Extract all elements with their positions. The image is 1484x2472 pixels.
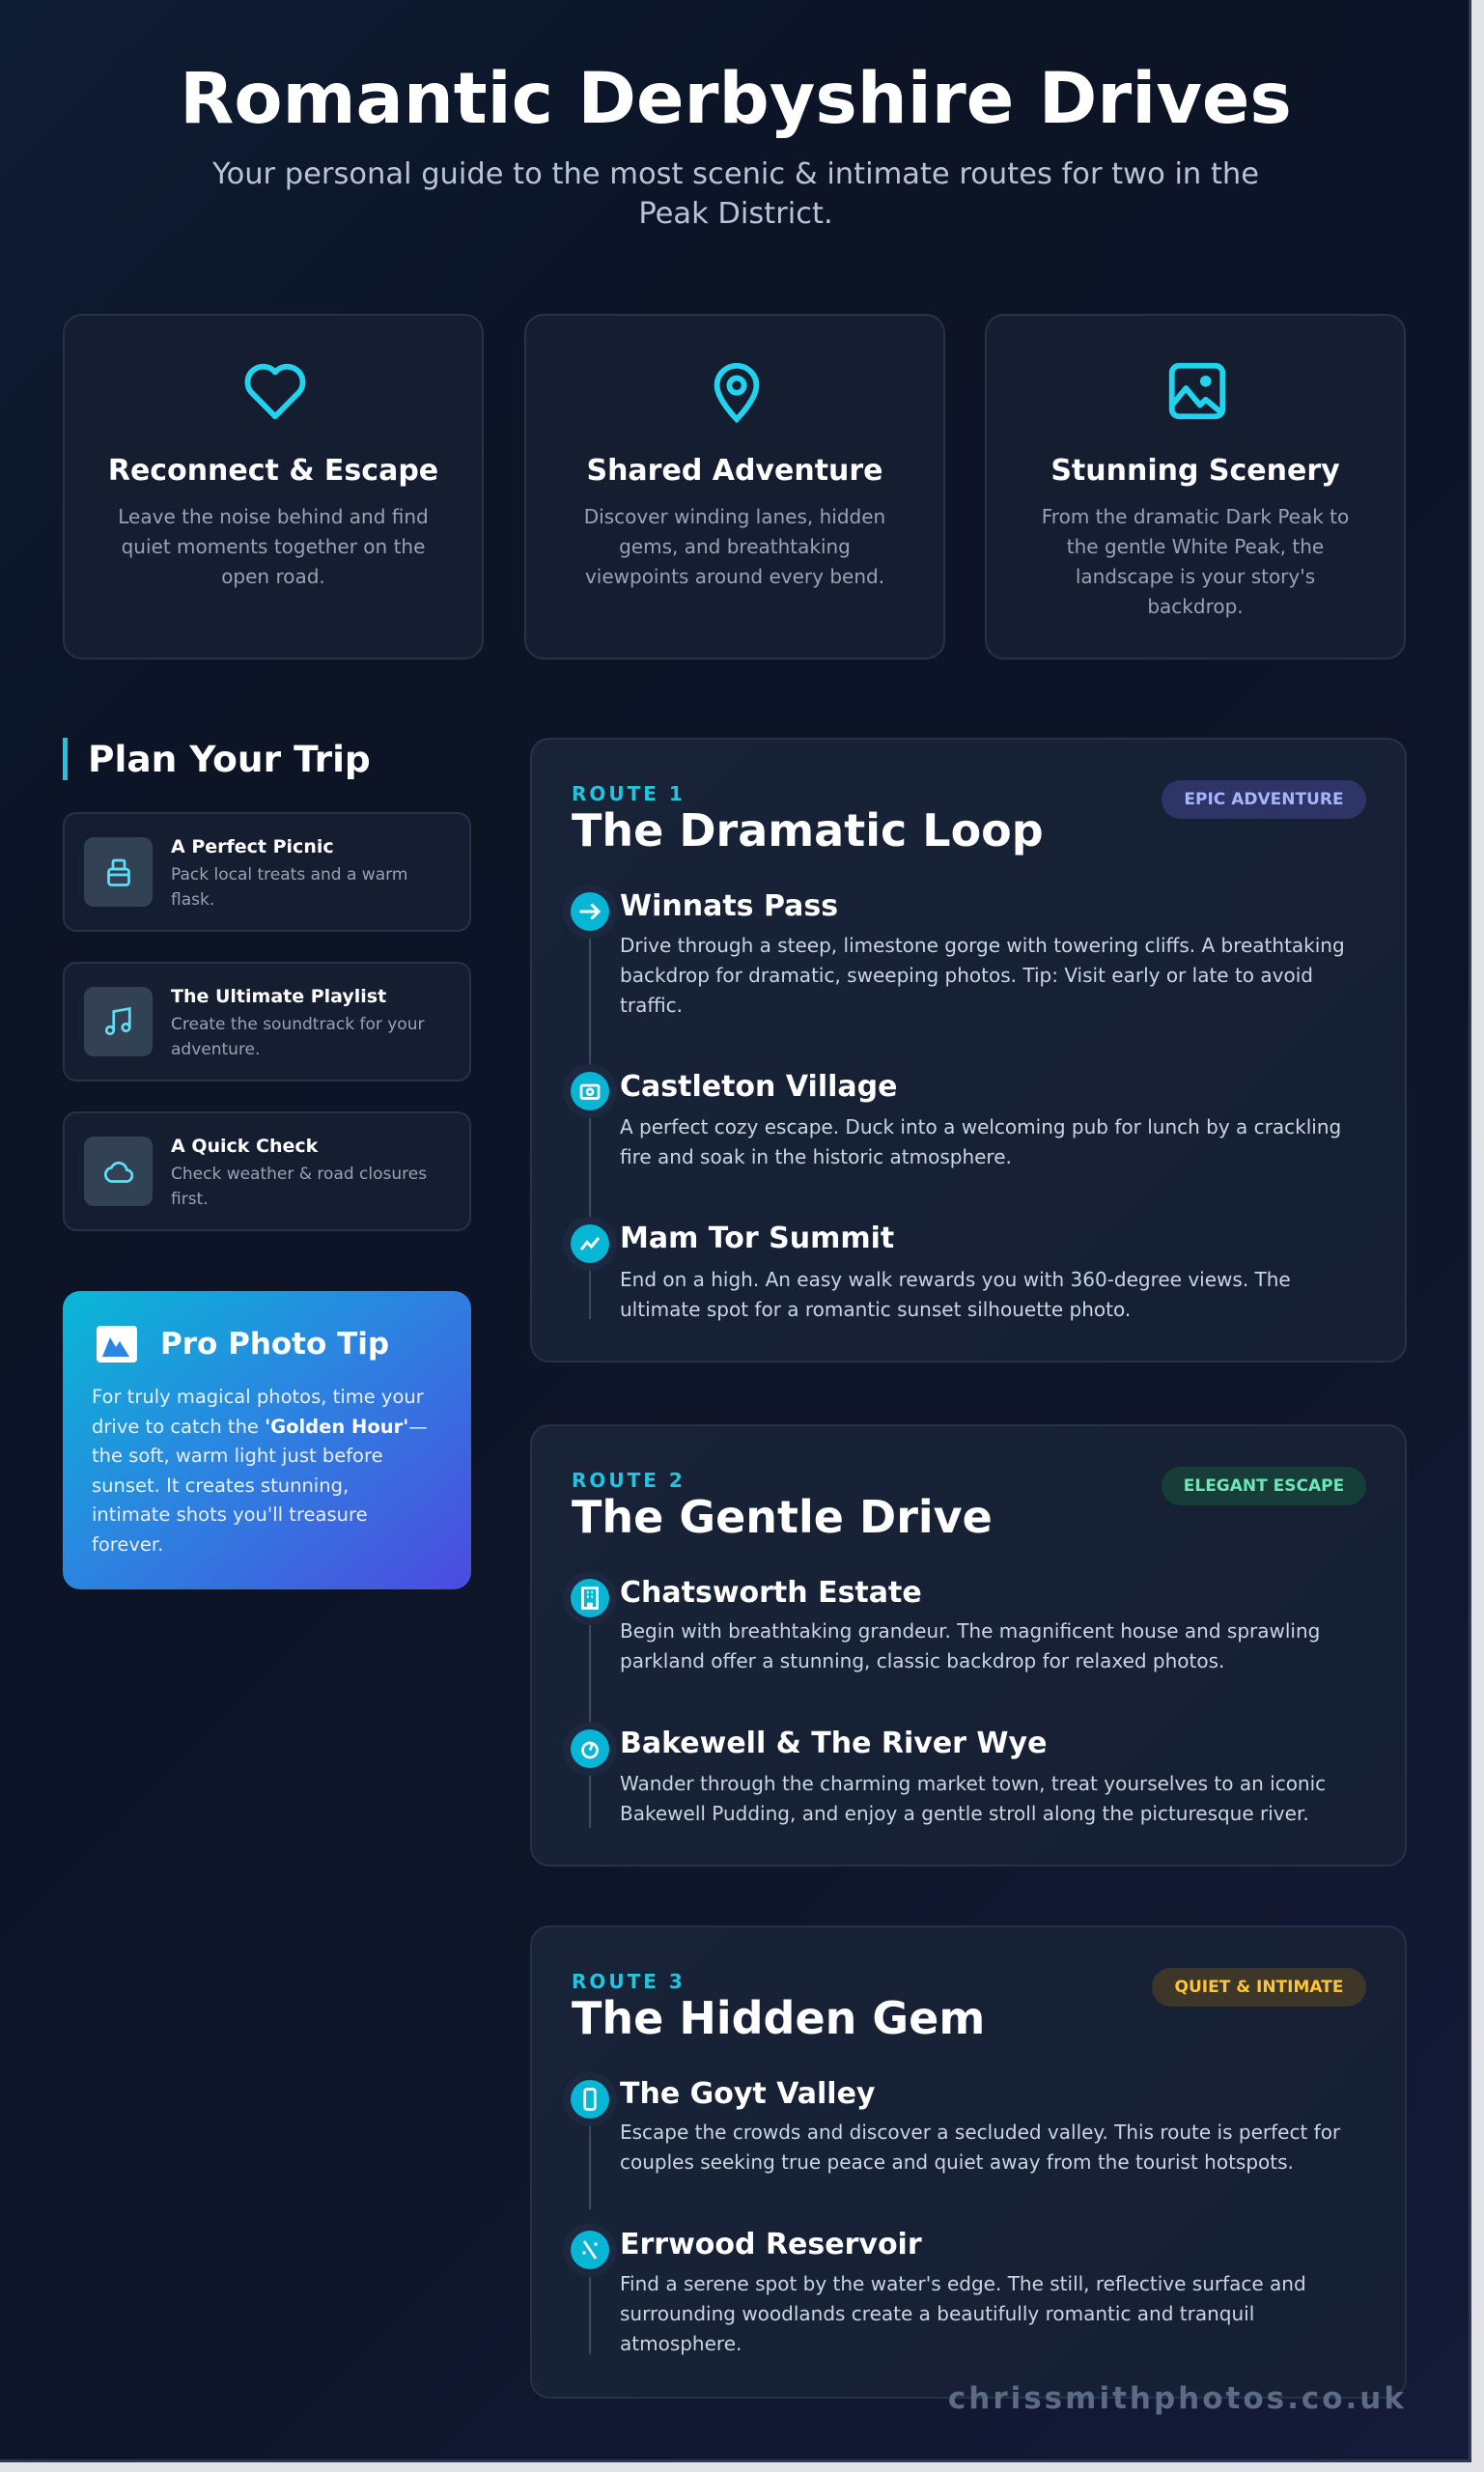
card: quick check: Check weather & road closures: [171, 1165, 427, 1184]
panel: route 3: Errwood Reservoir: [620, 2228, 922, 2261]
stop: winnats pass: [564, 885, 1345, 1017]
panel: route 2: [530, 1424, 1407, 1867]
badge: epic adventure: EPIC ADVENTURE: [1184, 790, 1344, 809]
panel: reconnect & escape: Reconnect & Escape: [108, 454, 438, 488]
panel: route 3: ROUTE 3: [572, 1970, 686, 1993]
panel: stunning scenery: backdrop.: [1147, 595, 1244, 618]
panel: stunning scenery: [985, 314, 1406, 660]
panel: stunning scenery: From the dramatic Dark Peak to: [1042, 505, 1349, 528]
stop: bakewell: [563, 1722, 1326, 1825]
panel: route 1: ultimate spot for a romantic sunset silhouette photo.: [620, 1298, 1131, 1321]
card: quick check: first.: [171, 1190, 209, 1209]
panel: reconnect & escape: [63, 314, 484, 660]
panel: route 1: fire and soak in the historic atmosphere.: [620, 1145, 1012, 1168]
callout: pro photo tip: intimate shots you'll treasure: [92, 1503, 368, 1526]
stop: mam tor summit: [563, 1217, 1291, 1321]
panel: route 1: A perfect cozy escape. Duck into a welcoming pub for lunch by a crackling: [620, 1115, 1341, 1138]
icon: flask: [84, 837, 153, 907]
panel: route 2: Bakewell & The River Wye: [620, 1727, 1047, 1760]
card: ultimate playlist: The Ultimate Playlist: [171, 986, 386, 1007]
panel: shared adventure: Discover winding lanes, hidden: [584, 505, 885, 528]
panel: route 3: [530, 1925, 1407, 2399]
panel: reconnect & escape: Leave the noise behind and find: [118, 505, 429, 528]
panel: route 1: Winnats Pass: [620, 889, 838, 923]
panel: route 3: surrounding woodlands create a beautifully romantic and tranquil: [620, 2302, 1254, 2325]
card: quick check: [63, 1111, 471, 1231]
icon: heart: [245, 363, 305, 419]
panel: route 1: ROUTE 1: [572, 782, 686, 805]
panel: route 2: ROUTE 2: [572, 1469, 686, 1492]
panel: route 2: Wander through the charming market town, treat yourselves to an iconic: [620, 1772, 1326, 1795]
callout: pro photo tip: sunset. It creates stunning,: [92, 1474, 349, 1497]
panel: route 2: parkland offer a stunning, classic backdrop for relaxed photos.: [620, 1649, 1224, 1672]
panel: route 2: Bakewell Pudding, and enjoy a gentle stroll along the picturesque river.: [620, 1802, 1309, 1825]
icon: map pin: [714, 363, 759, 423]
title: Romantic Derbyshire Drives: [180, 58, 1292, 140]
panel: route 1: End on a high. An easy walk rewards you with 360-degree views. The: [620, 1268, 1291, 1291]
card: quick check: A Quick Check: [171, 1136, 318, 1157]
subtitle: Peak District.: [638, 197, 833, 231]
panel: stunning scenery: landscape is your story's: [1076, 565, 1315, 588]
panel: route 3: Escape the crowds and discover a secluded valley. This route is perfect for: [620, 2121, 1340, 2144]
panel: route 1: Mam Tor Summit: [620, 1222, 894, 1255]
panel: route 2: Chatsworth Estate: [620, 1576, 922, 1610]
subtitle: Your personal guide to the most scenic & intimate routes for two in the: [212, 157, 1259, 191]
icon: cloud: [84, 1137, 153, 1206]
panel: shared adventure: Shared Adventure: [586, 454, 883, 488]
card: perfect picnic: flask.: [171, 890, 214, 910]
badge: epic adventure: [1162, 780, 1366, 819]
subtitle: [212, 157, 1259, 231]
panel: route 3: couples seeking true peace and quiet away from the tourist hotspots.: [620, 2150, 1294, 2174]
card: perfect picnic: [63, 812, 471, 932]
badge: quiet & intimate: QUIET & INTIMATE: [1175, 1978, 1343, 1997]
callout: pro photo tip: forever.: [92, 1533, 163, 1555]
badge: quiet & intimate: [1152, 1968, 1366, 2007]
icon: photo: [97, 1326, 137, 1362]
card: ultimate playlist: adventure.: [171, 1040, 260, 1059]
panel: shared adventure: gems, and breathtaking: [619, 535, 851, 558]
icon: music: [84, 987, 153, 1056]
panel: route 1: The Dramatic Loop: [572, 804, 1044, 857]
stop: castleton village: [563, 1064, 1341, 1168]
panel: stunning scenery: Stunning Scenery: [1050, 454, 1340, 488]
stop: chatsworth estate: [564, 1571, 1320, 1672]
panel: route 1: traffic.: [620, 994, 683, 1017]
panel: shared adventure: viewpoints around every bend.: [585, 565, 884, 588]
watermark: chrissmithphotos.co.uk: [948, 2381, 1407, 2416]
callout: pro photo tip: drive to catch the 'Golden Hour'—: [92, 1416, 428, 1437]
panel: route 3: Find a serene spot by the water's edge. The still, reflective surface and: [620, 2272, 1306, 2295]
icon: image: [1168, 363, 1226, 419]
callout: pro photo tip: the soft, warm light just before: [92, 1445, 383, 1467]
panel: route 3: atmosphere.: [620, 2332, 742, 2355]
panel: stunning scenery: the gentle White Peak, the: [1067, 535, 1324, 558]
heading: plan your trip: Plan Your Trip: [88, 738, 371, 780]
panel: route 1: backdrop for dramatic, sweeping photos. Tip: Visit early or late to avoid: [620, 964, 1313, 987]
card: perfect picnic: A Perfect Picnic: [171, 836, 334, 857]
panel: route 3: The Goyt Valley: [620, 2077, 875, 2111]
callout: pro photo tip: Pro Photo Tip: [160, 1327, 389, 1362]
panel: reconnect & escape: quiet moments together on the: [122, 535, 425, 558]
panel: route 1: [530, 738, 1407, 1362]
panel: route 1: Castleton Village: [620, 1070, 897, 1104]
badge: elegant escape: [1162, 1467, 1366, 1505]
panel: route 2: Begin with breathtaking grandeur. The magnificent house and sprawling: [620, 1619, 1320, 1643]
panel: reconnect & escape: open road.: [221, 565, 325, 588]
callout: pro photo tip: [63, 1291, 471, 1589]
card: ultimate playlist: [63, 962, 471, 1082]
card: perfect picnic: Pack local treats and a warm: [171, 865, 407, 885]
card: ultimate playlist: Create the soundtrack for your: [171, 1015, 424, 1034]
stop: errwood reservoir: [563, 2223, 1306, 2355]
badge: elegant escape: ELEGANT ESCAPE: [1184, 1476, 1344, 1496]
panel: shared adventure: [524, 314, 945, 660]
panel: route 1: Drive through a steep, limestone gorge with towering cliffs. A breathtaking: [620, 934, 1345, 957]
stop: goyt valley: [564, 2072, 1340, 2174]
callout: pro photo tip: For truly magical photos, time your: [92, 1386, 424, 1408]
panel: route 3: The Hidden Gem: [572, 1992, 985, 2044]
panel: route 2: The Gentle Drive: [572, 1491, 993, 1543]
